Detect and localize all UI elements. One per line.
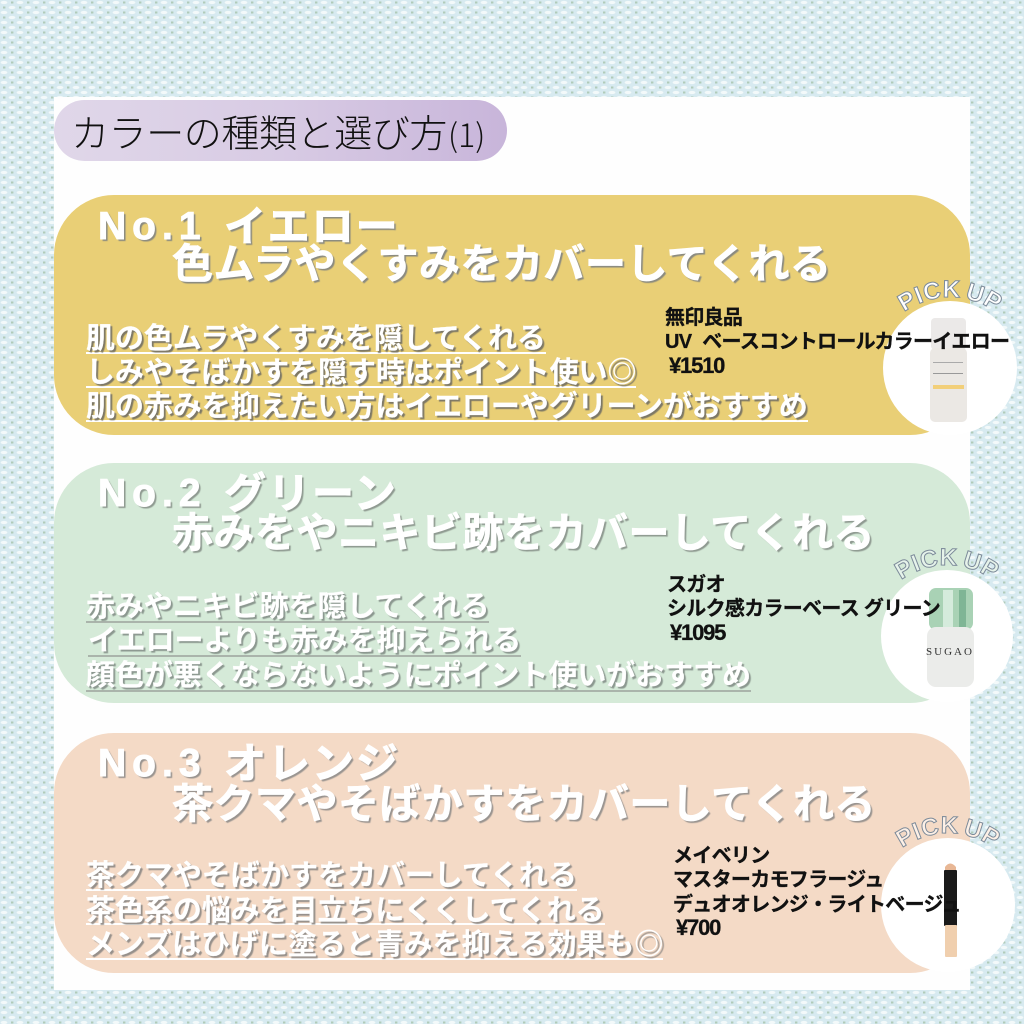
subheading: 茶クマやそばかすをカバーしてくれる <box>172 781 876 827</box>
body line 3: 顔色が悪くならないようにポイント使いがおすすめ <box>86 660 751 692</box>
product text <box>673 845 961 940</box>
heading: No.3: No.3 <box>98 742 207 785</box>
white panel <box>54 97 970 990</box>
orange card background <box>54 733 970 973</box>
green card background <box>54 463 970 703</box>
shade: デュオオレンジ・ライトベージュ <box>673 894 961 916</box>
product circle and stick: PICK UP <box>894 816 1000 848</box>
product circle and bottle <box>881 548 1013 700</box>
subheading: 赤みをやニキビ跡をカバーしてくれる <box>172 510 875 556</box>
body line 2: しみやそばかすを隠す時はポイント使い◎ <box>86 357 636 389</box>
heading: No.1: No.1 <box>98 205 207 248</box>
yellow card background <box>54 195 970 435</box>
body line 1: 赤みやニキビ跡を隠してくれる <box>86 591 489 623</box>
brand: 無印良品 <box>665 307 742 329</box>
heading: No.2 <box>98 470 398 517</box>
subheading: 色ムラやくすみをカバーしてくれる <box>172 241 832 287</box>
brand: メイベリン <box>673 845 770 867</box>
body line 2: 茶色系の悩みを目立ちにくくしてくれる <box>86 895 605 927</box>
heading: No.1 <box>98 203 400 250</box>
product name: マスターカモフラージュ <box>673 869 884 891</box>
body line 3: メンズはひげに塗ると青みを抑える効果も◎ <box>86 929 663 961</box>
panel: orange: オレンジ <box>224 740 400 787</box>
body line 1: 茶クマやそばかすをカバーしてくれる <box>86 860 577 892</box>
product circle and bottle <box>883 280 1017 432</box>
price: ¥1095 <box>670 620 725 645</box>
brand: スガオ <box>667 574 725 596</box>
title: カラーの種類と選び方(1) <box>71 111 485 157</box>
product text <box>665 306 1009 378</box>
body line 2: イエローよりも赤みを抑えられる <box>88 625 521 657</box>
product circle and bottle: PICK UP <box>893 548 999 580</box>
panel: yellow: イエロー <box>224 203 400 250</box>
title pill <box>54 100 507 161</box>
body line 1: 肌の色ムラやくすみを隠してくれる <box>86 323 546 355</box>
panel: green: グリーン <box>224 470 398 517</box>
product name: シルク感カラーベース グリーン <box>667 598 940 620</box>
heading: No.2: No.2 <box>98 472 207 515</box>
product name: UV ベースコントロールカラーイエロー <box>665 331 1009 353</box>
product circle and bottle: PICK UP <box>896 280 1002 312</box>
price: ¥700 <box>676 915 720 940</box>
price: ¥1510 <box>669 353 724 378</box>
body line 3: 肌の赤みを抑えたい方はイエローやグリーンがおすすめ <box>86 391 808 423</box>
product circle and stick <box>881 816 1015 970</box>
product text <box>667 574 940 645</box>
heading: No.3 <box>98 740 400 787</box>
product circle and bottle: SUGAO <box>926 646 974 658</box>
